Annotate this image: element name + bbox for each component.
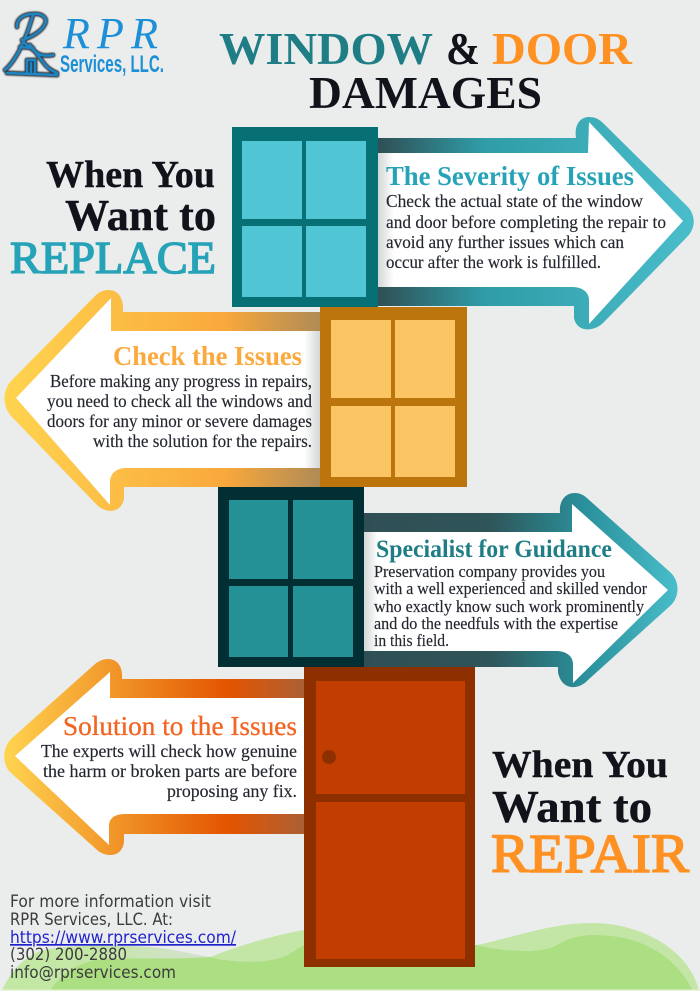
- logo text: RPR: RPR: [62, 9, 158, 58]
- heading: When You Want to Replace: Want to: [65, 191, 216, 240]
- contact information: [10, 892, 236, 983]
- body text: who exactly know such work prominently: [374, 597, 645, 616]
- title word: ampersand: &: [446, 23, 480, 74]
- heading: When You Want to Repair: Want to: [492, 781, 652, 832]
- body text: [374, 562, 647, 650]
- window: teal: [232, 127, 378, 307]
- arrow panel: specialist for guidance: [364, 493, 678, 687]
- body text: [47, 371, 312, 451]
- heading: When You Want to Replace: [10, 154, 216, 283]
- logo: [5, 9, 164, 78]
- contact information: info@rprservices.com: [10, 963, 176, 983]
- arrow panel: the severity of issues: [378, 117, 694, 329]
- heading: Specialist for Guidance: [376, 536, 612, 563]
- body text: the harm or broken parts are before: [43, 761, 297, 781]
- body text: [386, 191, 666, 272]
- body text: avoid any further issues which can: [386, 232, 624, 252]
- heading: Check the Issues: [113, 341, 302, 371]
- arrow panel: solution to the issues: [4, 659, 304, 855]
- door: [304, 667, 475, 967]
- body text: in this field.: [374, 631, 449, 650]
- heading: When You Want to Replace: When You: [46, 154, 215, 196]
- body text: and do the needfuls with the expertise: [374, 614, 618, 633]
- contact information: For more information visit: [10, 892, 211, 912]
- body text: occur after the work is fulfilled.: [386, 252, 601, 272]
- body text: proposing any fix.: [167, 781, 297, 801]
- logo text: Services, LLC.: Services, LLC.: [60, 51, 164, 78]
- contact information: https://www.rprservices.com/: [10, 928, 236, 948]
- body text: doors for any minor or severe damages: [47, 411, 312, 431]
- grass hills: [0, 923, 700, 991]
- body text: with a well experienced and skilled vendor: [374, 579, 647, 598]
- title word: DOOR: DOOR: [492, 23, 633, 74]
- body text: [41, 741, 297, 801]
- body text: Before making any progress in repairs,: [50, 371, 312, 391]
- window: dark teal: [218, 487, 364, 667]
- body text: Check the actual state of the window: [386, 191, 643, 211]
- heading: When You Want to Repair: When You: [492, 744, 668, 786]
- body text: The experts will check how genuine: [41, 741, 297, 761]
- title: [219, 23, 633, 118]
- heading: Solution to the Issues: [63, 711, 297, 741]
- body text: Preservation company provides you: [374, 562, 605, 581]
- door knob: [322, 750, 336, 764]
- icon: house monogram: [5, 14, 57, 75]
- body text: with the solution for the repairs.: [93, 431, 312, 451]
- heading: When You Want to Replace: REPLACE: [10, 232, 216, 283]
- body text: you need to check all the windows and: [47, 391, 312, 411]
- window: amber: [320, 307, 467, 487]
- title word: WINDOW: WINDOW: [219, 23, 433, 74]
- body text: and door before completing the repair to: [386, 212, 666, 232]
- title word: DAMAGES: DAMAGES: [309, 67, 542, 118]
- heading: The Severity of Issues: [386, 161, 634, 191]
- arrow panel: check the issues: [4, 290, 320, 511]
- heading: When You Want to Repair: [491, 744, 689, 884]
- contact information: RPR Services, LLC. At:: [10, 910, 173, 930]
- contact information: (302) 200-2880: [10, 945, 127, 965]
- heading: When You Want to Repair: REPAIR: [491, 823, 689, 884]
